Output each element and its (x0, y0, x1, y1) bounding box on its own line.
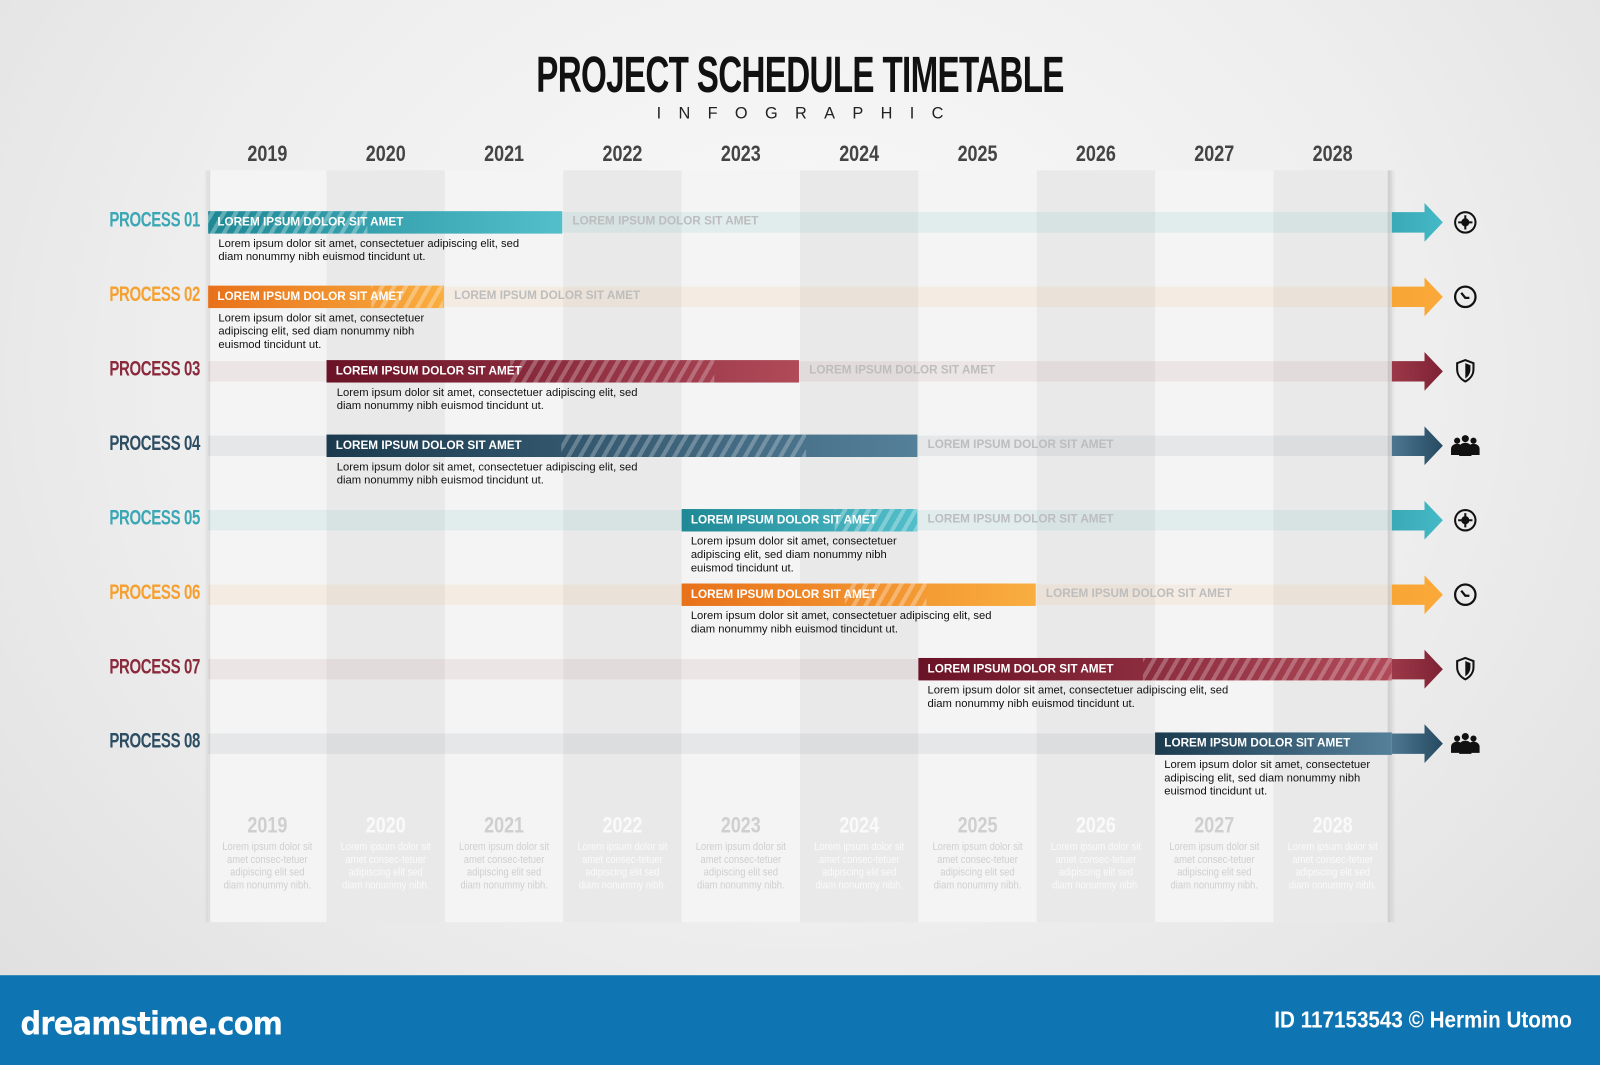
process 08: PROCESS 08 (109, 729, 200, 753)
icon: shield 2 (1457, 658, 1473, 679)
process 02: LOREM IPSUM DOLOR SIT AMET (217, 291, 403, 303)
icon: team (1451, 435, 1480, 456)
process 05: adipiscing elit, sed diam nonummy nibh (691, 549, 887, 561)
process 01: Lorem ipsum dolor sit amet, consectetuer adipiscing elit, sed (218, 238, 519, 250)
year headers: 2021 (484, 141, 524, 166)
icon: clock (1455, 287, 1476, 307)
process 07: diam nonummy nibh euismod tincidunt ut. (928, 698, 1135, 710)
process 08: euismod tincidunt ut. (1164, 785, 1267, 798)
footer logo: dreamstime.com (20, 1006, 282, 1043)
icon: compass (1455, 212, 1476, 233)
year headers: 2020 (366, 141, 406, 166)
bottom year notes: 2019 (247, 812, 287, 838)
process 03: Lorem ipsum dolor sit amet, consectetuer adipiscing elit, sed (337, 387, 637, 399)
arrow 8 (1392, 724, 1443, 763)
bottom year notes: 2023 (721, 812, 761, 838)
year headers: 2024 (839, 141, 879, 166)
year headers (247, 141, 1353, 166)
footer band (0, 975, 1600, 1065)
arrows and icons (1392, 203, 1480, 763)
arrow 6 (1392, 575, 1443, 614)
year headers: 2022 (602, 141, 642, 166)
process 06: Lorem ipsum dolor sit amet, consectetuer adipiscing elit, sed (691, 610, 992, 622)
process 08: adipiscing elit, sed diam nonummy nibh (1164, 772, 1360, 784)
icon: shield (1457, 360, 1473, 382)
process 04: LOREM IPSUM DOLOR SIT AMET (336, 440, 522, 452)
bottom year notes: 2026 (1076, 812, 1116, 838)
year headers: 2028 (1313, 141, 1353, 166)
process 06 (109, 580, 1392, 636)
arrow 7 (1392, 650, 1443, 689)
arrow 5 (1392, 501, 1443, 540)
process 06: LOREM IPSUM DOLOR SIT AMET (691, 589, 877, 601)
year headers: 2023 (721, 141, 761, 166)
bottom year notes: 2027 (1194, 812, 1234, 838)
process 04: Lorem ipsum dolor sit amet, consectetuer adipiscing elit, sed (337, 461, 637, 473)
process 01: LOREM IPSUM DOLOR SIT AMET (217, 216, 403, 229)
arrow 2 (1392, 277, 1443, 316)
process 06: diam nonummy nibh euismod tincidunt ut. (691, 623, 898, 636)
process 08 (109, 729, 1392, 798)
process 05: PROCESS 05 (109, 506, 200, 529)
bottom year notes: Lorem ipsum dolor sit amet consec-tetuer adipiscing elit sed diam nonummy nibh. (932, 841, 1023, 891)
process 03: PROCESS 03 (109, 357, 200, 381)
bottom year notes: Lorem ipsum dolor sit amet consec-tetuer adipiscing elit sed diam nonummy nibh. (814, 841, 904, 891)
process 05 (109, 506, 1392, 574)
process 01: PROCESS 01 (109, 208, 200, 232)
process 05: LOREM IPSUM DOLOR SIT AMET (928, 513, 1114, 525)
bottom year notes: Lorem ipsum dolor sit amet consec-tetuer adipiscing elit sed diam nonummy nibh. (696, 841, 786, 891)
footer credit: ID 117153543 © Hermin Utomo (1274, 1006, 1571, 1032)
process 04: PROCESS 04 (109, 432, 200, 455)
process 03 (109, 357, 1392, 412)
process 07: Lorem ipsum dolor sit amet, consectetuer adipiscing elit, sed (928, 684, 1228, 697)
bottom year notes: Lorem ipsum dolor sit amet consec-tetuer adipiscing elit sed diam nonummy nibh. (1051, 841, 1141, 891)
process 05: LOREM IPSUM DOLOR SIT AMET (691, 514, 877, 526)
year headers: 2027 (1194, 141, 1234, 166)
bottom year notes: Lorem ipsum dolor sit amet consec-tetuer adipiscing elit sed diam nonummy nibh. (577, 841, 668, 891)
icon: compass 2 (1455, 510, 1476, 530)
bottom year notes: 2021 (484, 812, 524, 838)
process 08: LOREM IPSUM DOLOR SIT AMET (1164, 738, 1350, 750)
process 02: PROCESS 02 (109, 283, 200, 306)
bottom year notes: Lorem ipsum dolor sit amet consec-tetuer adipiscing elit sed diam nonummy nibh. (341, 841, 431, 891)
year headers: 2019 (247, 141, 287, 166)
process 02: LOREM IPSUM DOLOR SIT AMET (454, 290, 640, 302)
bottom year notes: Lorem ipsum dolor sit amet consec-tetuer adipiscing elit sed diam nonummy nibh. (459, 841, 549, 891)
arrow 3 (1392, 352, 1443, 391)
process 07: LOREM IPSUM DOLOR SIT AMET (928, 663, 1114, 675)
bottom year notes: 2028 (1313, 812, 1353, 838)
process 06: LOREM IPSUM DOLOR SIT AMET (1046, 588, 1232, 600)
icon: team 2 (1451, 733, 1480, 754)
process 01: diam nonummy nibh euismod tincidunt ut. (218, 251, 426, 263)
process 07 (109, 655, 1392, 710)
process 08: Lorem ipsum dolor sit amet, consectetuer (1164, 759, 1370, 771)
process 04 (109, 432, 1392, 487)
subtitle: INFOGRAPHIC (657, 105, 961, 122)
process 03: LOREM IPSUM DOLOR SIT AMET (809, 364, 995, 376)
process 02: adipiscing elit, sed diam nonummy nibh (218, 325, 414, 338)
process 02: Lorem ipsum dolor sit amet, consectetuer (218, 312, 424, 324)
process 07: PROCESS 07 (109, 655, 200, 678)
bottom year notes: Lorem ipsum dolor sit amet consec-tetuer adipiscing elit sed diam nonummy nibh. (1288, 841, 1378, 891)
year headers: 2025 (958, 141, 998, 166)
process 01: LOREM IPSUM DOLOR SIT AMET (572, 215, 758, 227)
arrow 1 (1392, 203, 1443, 242)
title: PROJECT SCHEDULE TIMETABLE (536, 46, 1064, 103)
process 05: Lorem ipsum dolor sit amet, consectetuer (691, 536, 897, 548)
process 05: euismod tincidunt ut. (691, 562, 794, 574)
process 04: diam nonummy nibh euismod tincidunt ut. (337, 474, 544, 487)
bottom year notes: Lorem ipsum dolor sit amet consec-tetuer adipiscing elit sed diam nonummy nibh. (1169, 841, 1259, 891)
bottom year notes: 2020 (366, 812, 406, 838)
bottom year notes: 2025 (958, 812, 998, 838)
process 02: euismod tincidunt ut. (218, 339, 321, 351)
process 03: diam nonummy nibh euismod tincidunt ut. (337, 400, 544, 412)
process 03: LOREM IPSUM DOLOR SIT AMET (336, 365, 522, 377)
year headers: 2026 (1076, 141, 1116, 166)
icon: clock 2 (1455, 585, 1476, 605)
process 02 (109, 283, 1392, 351)
bottom year notes: Lorem ipsum dolor sit amet consec-tetuer adipiscing elit sed diam nonummy nibh. (222, 841, 312, 891)
process 06: PROCESS 06 (109, 580, 200, 604)
process 04: LOREM IPSUM DOLOR SIT AMET (928, 439, 1114, 451)
process rows (109, 208, 1392, 798)
arrow 4 (1392, 426, 1443, 465)
bottom year notes: 2024 (839, 812, 879, 838)
process 01 (109, 208, 1392, 263)
bottom year notes: 2022 (602, 812, 642, 838)
